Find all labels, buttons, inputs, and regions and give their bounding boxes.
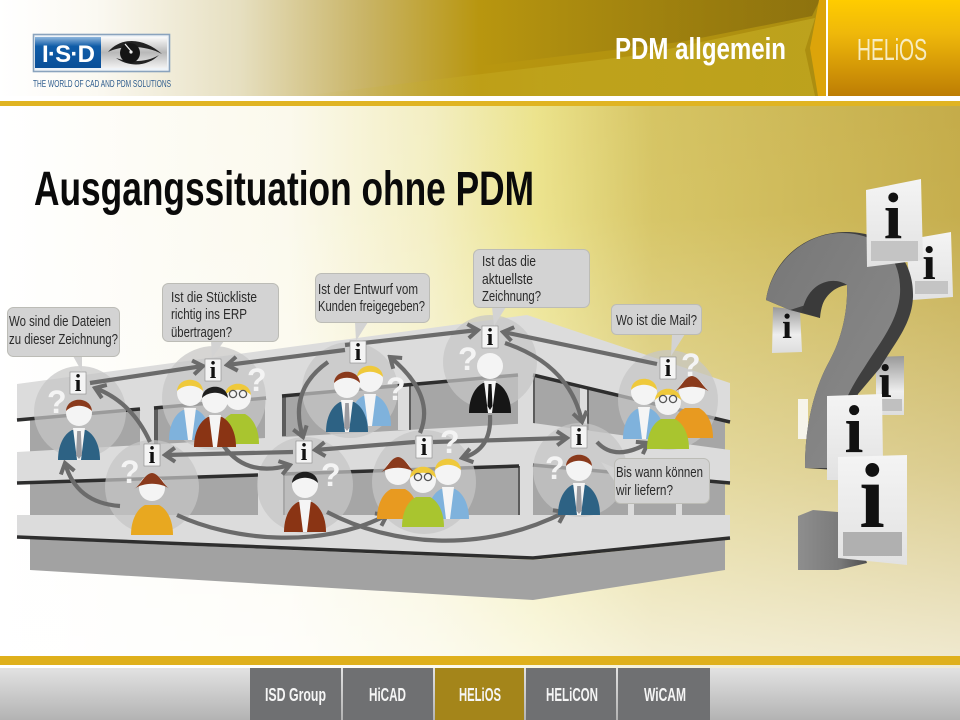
upper wall xyxy=(30,373,725,452)
white sheet sliver xyxy=(798,399,808,439)
tab: ISD Group: ISD Group xyxy=(265,685,326,705)
question marks: ? xyxy=(47,384,67,420)
callout: Dateien: zu dieser Zeichnung? xyxy=(9,331,118,348)
middle slab xyxy=(17,423,730,483)
tab: ISD Group xyxy=(250,668,341,720)
info icons: i xyxy=(665,356,672,382)
question marks: ? xyxy=(247,362,267,398)
group: three colleagues top xyxy=(169,380,259,447)
callout: Entwurf xyxy=(316,274,430,341)
question marks: ? xyxy=(681,347,701,383)
sheet middle xyxy=(827,391,883,480)
callout: Stückliste: richtig ins ERP xyxy=(171,306,247,323)
callout: Liefertermin: Bis wann können xyxy=(616,464,703,481)
logo tagline: THE WORLD OF CAD AND PDM SOLUTIONS xyxy=(33,79,171,90)
sheet behind left xyxy=(772,307,802,353)
tab: WiCAM xyxy=(618,668,710,720)
flow arrows xyxy=(65,330,657,541)
question marks: ? xyxy=(440,424,460,460)
section label: PDM allgemein xyxy=(615,31,786,66)
callout: Stückliste: Ist die Stückliste xyxy=(171,289,257,306)
person: woman in yellow xyxy=(131,473,173,535)
title: Ausgangssituation ohne PDM xyxy=(34,163,534,216)
question marks: ? xyxy=(120,454,140,490)
logo letters: I·S·D xyxy=(42,41,95,68)
tab: HiCAD: HiCAD xyxy=(369,685,406,705)
callout: Dateien xyxy=(8,308,120,372)
sheet front xyxy=(838,445,907,565)
sheet front: i xyxy=(859,445,885,547)
info icons: i xyxy=(487,325,494,351)
sheet behind middle xyxy=(876,355,904,415)
question mark inner shadow xyxy=(802,281,847,318)
callout: aktuellste Zeichnung: Ist das die xyxy=(482,253,536,270)
highlight circles xyxy=(34,315,718,534)
callout: aktuellste Zeichnung xyxy=(474,250,590,326)
slab edges xyxy=(17,375,730,558)
tab: WiCAM: WiCAM xyxy=(644,685,686,705)
person: consultant bottom right xyxy=(558,455,600,515)
product box xyxy=(828,0,960,96)
pillars xyxy=(140,370,682,515)
question marks xyxy=(47,341,701,493)
tab: HELiCON xyxy=(526,668,616,720)
info icons: i xyxy=(75,371,82,397)
info icons: i xyxy=(301,440,308,466)
footer navigation xyxy=(250,668,710,720)
group: three colleagues bottom centre xyxy=(377,457,469,527)
question mark dot xyxy=(798,510,867,570)
info icons: i xyxy=(421,435,428,461)
callout: Liefertermin xyxy=(601,458,710,504)
tab: HELiOS: HELiOS xyxy=(459,685,501,705)
base xyxy=(30,539,725,600)
person: man in brown xyxy=(284,472,326,532)
group: two colleagues top centre xyxy=(326,366,391,432)
sheet behind left: i xyxy=(782,307,792,346)
sheet top xyxy=(866,179,923,267)
info icons: i xyxy=(210,358,217,384)
sheet behind right xyxy=(905,232,953,300)
callout: aktuellste Zeichnung: Zeichnung? xyxy=(482,288,541,305)
callout: Stückliste xyxy=(162,284,278,358)
logo eye xyxy=(108,41,162,64)
footer band xyxy=(0,668,960,720)
callout: aktuellste Zeichnung: aktuellste xyxy=(482,271,533,288)
callout: Mail xyxy=(612,304,702,356)
big question mark with info sheets xyxy=(766,179,953,570)
group: three colleagues right xyxy=(623,376,713,449)
info icons: i xyxy=(355,340,362,366)
lower wall xyxy=(30,465,725,515)
callout: Mail: Wo ist die Mail? xyxy=(616,312,697,329)
callout: Entwurf: Ist der Entwurf vom xyxy=(318,281,418,298)
question marks: ? xyxy=(545,450,565,486)
logo blue field xyxy=(35,37,101,68)
tab: HELiCON: HELiCON xyxy=(546,685,598,705)
sheet top: i xyxy=(884,180,902,253)
person: consultant left xyxy=(58,400,100,460)
callout: Stückliste: übertragen? xyxy=(171,324,232,341)
sheet behind right: i xyxy=(922,237,936,290)
lower slab xyxy=(17,515,730,558)
sheet behind middle: i xyxy=(878,355,892,408)
callout: Liefertermin: wir liefern? xyxy=(615,482,673,499)
header rule xyxy=(0,101,960,106)
header banner xyxy=(0,0,960,101)
header arrow tab xyxy=(810,0,827,96)
question marks: ? xyxy=(386,371,406,407)
question marks: ? xyxy=(321,457,341,493)
roof slab xyxy=(17,315,730,422)
window frames xyxy=(154,375,589,515)
info icons: i xyxy=(149,443,156,469)
footer rule xyxy=(0,656,960,665)
building xyxy=(17,315,730,600)
question marks: ? xyxy=(458,341,478,377)
question mark front xyxy=(766,233,900,468)
sheet middle: i xyxy=(845,391,863,467)
question mark body xyxy=(766,232,913,470)
callout: Dateien: Wo sind die Dateien xyxy=(9,313,111,330)
tab: HiCAD xyxy=(343,668,433,720)
logo xyxy=(33,34,171,90)
info icons: i xyxy=(576,425,583,451)
person: manager in black xyxy=(469,353,511,413)
info icons xyxy=(70,325,676,469)
tab: HELiOS xyxy=(435,668,524,720)
logo eye field xyxy=(101,37,167,68)
callout: Entwurf: Kunden freigegeben? xyxy=(318,298,425,315)
